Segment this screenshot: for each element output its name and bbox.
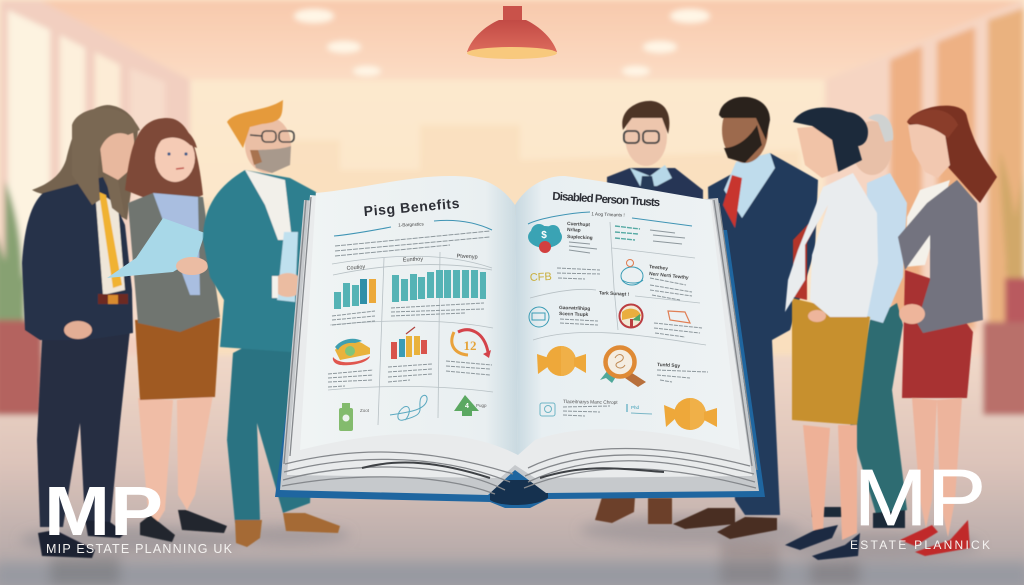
right page content: Tewthey (649, 264, 668, 272)
heading: Pisg Benefits: Pisg Benefits (363, 195, 460, 219)
blouse and tie (95, 190, 125, 295)
right page content (528, 191, 717, 430)
right wall panels (825, 0, 1024, 420)
icon: tree in red circle (620, 304, 642, 328)
person: woman in grey jacket (125, 118, 227, 542)
caption lines (328, 303, 492, 387)
person: red-haired woman in grey jacket (898, 106, 997, 556)
trousers (227, 323, 318, 523)
document (277, 232, 298, 302)
left plant and planter (0, 180, 43, 415)
right page content: Nerr Nerti Tewthy (649, 271, 689, 281)
skirt (135, 318, 220, 400)
subheading rule: 1-Bargnstics (398, 221, 425, 228)
right page (515, 176, 740, 455)
icon: green tree (454, 395, 487, 416)
document held by women (107, 218, 208, 278)
person: man in teal suit (203, 100, 340, 547)
label: teal note (627, 404, 652, 414)
teal list text (615, 226, 685, 244)
icon: location bubble (621, 260, 643, 285)
icon: green bottle: Zoot (360, 408, 370, 413)
head (245, 117, 291, 173)
icon: small bar chart (391, 327, 427, 359)
icon: green tree: Pugp (476, 403, 487, 408)
head (797, 125, 838, 178)
face (155, 134, 195, 182)
icon: green tree: 4 (465, 403, 469, 410)
shoes (785, 525, 860, 560)
right plant and planter (983, 150, 1024, 415)
icon: orange candy one (537, 346, 586, 376)
logo caption: ESTATE PLANNICK (850, 538, 990, 552)
jacket (898, 180, 983, 333)
text block 1: Suplecking (567, 234, 593, 241)
pendant lamp (467, 6, 557, 59)
hair (125, 118, 203, 205)
right page content: Tlaceitnarys Manc Chropt (563, 399, 618, 406)
head (98, 130, 135, 180)
top (793, 203, 828, 300)
subheading rule (528, 211, 692, 226)
heading: Disabled Person Trusts: Disabled Person Trusts (552, 191, 660, 209)
legs (803, 425, 857, 540)
icon: colourful wave (333, 339, 370, 365)
trousers (37, 330, 130, 527)
text block 1 (567, 221, 597, 253)
left page (300, 176, 518, 455)
logo left (44, 472, 233, 556)
shoes (38, 530, 95, 558)
icon: round teal badge (529, 307, 549, 327)
subheading rule: 1 Aog Tmeants ! (591, 211, 625, 218)
shoes (900, 520, 970, 556)
skirt (792, 298, 870, 425)
label: teal note: Phd (631, 405, 640, 410)
icon: teal cloud with coin: $ (541, 230, 547, 241)
floor (0, 355, 1024, 585)
icon: signature (390, 395, 427, 420)
floor reflections (0, 516, 1024, 585)
table grid (530, 222, 706, 345)
logo mark: MP (854, 453, 986, 542)
hair (227, 100, 283, 148)
intro text lines (335, 231, 490, 256)
shoes (812, 507, 905, 528)
page stack (280, 198, 759, 495)
icon: orange outline tag (668, 311, 690, 323)
logo right (850, 453, 990, 552)
icon: CFB letters: CFB (530, 271, 552, 284)
shoes (235, 520, 262, 547)
caption lines (557, 268, 708, 416)
icon: twelve circular arrow: 12 (464, 338, 476, 353)
logo caption: MIP ESTATE PLANNING UK (46, 542, 233, 556)
table grid (328, 252, 493, 425)
person: woman in navy suit (22, 105, 140, 558)
shirt (905, 180, 950, 267)
jacket (22, 177, 133, 340)
left page content: Eunthoy (403, 256, 423, 264)
open book (275, 176, 765, 508)
person: man with glasses behind book (595, 101, 703, 524)
icon: award ribbon (600, 348, 646, 387)
person: man in navy suit with red tie (673, 97, 818, 539)
ceiling (0, 0, 1024, 80)
shirt (245, 170, 292, 240)
shoes (673, 508, 777, 539)
hand (273, 273, 303, 297)
logo mark: MP (44, 472, 163, 550)
ceiling lights (294, 9, 710, 76)
icon: green bottle (339, 403, 370, 431)
hand (64, 321, 92, 339)
icon: teal cloud with coin (528, 224, 562, 253)
legs (912, 398, 962, 537)
icon: twelve circular arrow (452, 330, 491, 358)
blue cover (275, 230, 765, 508)
icon: camera outline (540, 403, 555, 416)
jacket (785, 173, 878, 317)
text block 1: Cuerthupt (567, 221, 590, 228)
bar chart small (334, 279, 376, 309)
hand (808, 310, 826, 322)
glasses (250, 131, 294, 142)
shoes (595, 497, 635, 523)
person: woman in white jacket (785, 107, 878, 560)
jacket (128, 193, 220, 332)
person: older man in light blue shirt (812, 114, 907, 528)
column labels: Coutioy (346, 264, 366, 272)
jacket (203, 170, 316, 352)
text block 1: Nrliap (567, 227, 581, 234)
blouse (153, 193, 200, 295)
hair back (32, 105, 138, 220)
right page content: Scecn Tsupk (559, 311, 589, 318)
right page content: Gaorwtrlihipg (559, 305, 590, 312)
shoes (140, 510, 227, 542)
section label: Tark Sunagt ! (599, 290, 630, 298)
legs (138, 395, 213, 523)
skirt (902, 270, 973, 398)
skyline haze (200, 125, 800, 360)
subheading rule (334, 220, 492, 236)
left wall and windows (0, 0, 190, 420)
left page content (328, 195, 493, 431)
head (908, 122, 950, 178)
icon: orange candy two (664, 398, 717, 430)
text block award: Tunfd Sgy (657, 362, 681, 369)
left page content: Ptwenyp (456, 253, 478, 261)
bar chart large (392, 270, 486, 302)
hand (899, 304, 925, 324)
